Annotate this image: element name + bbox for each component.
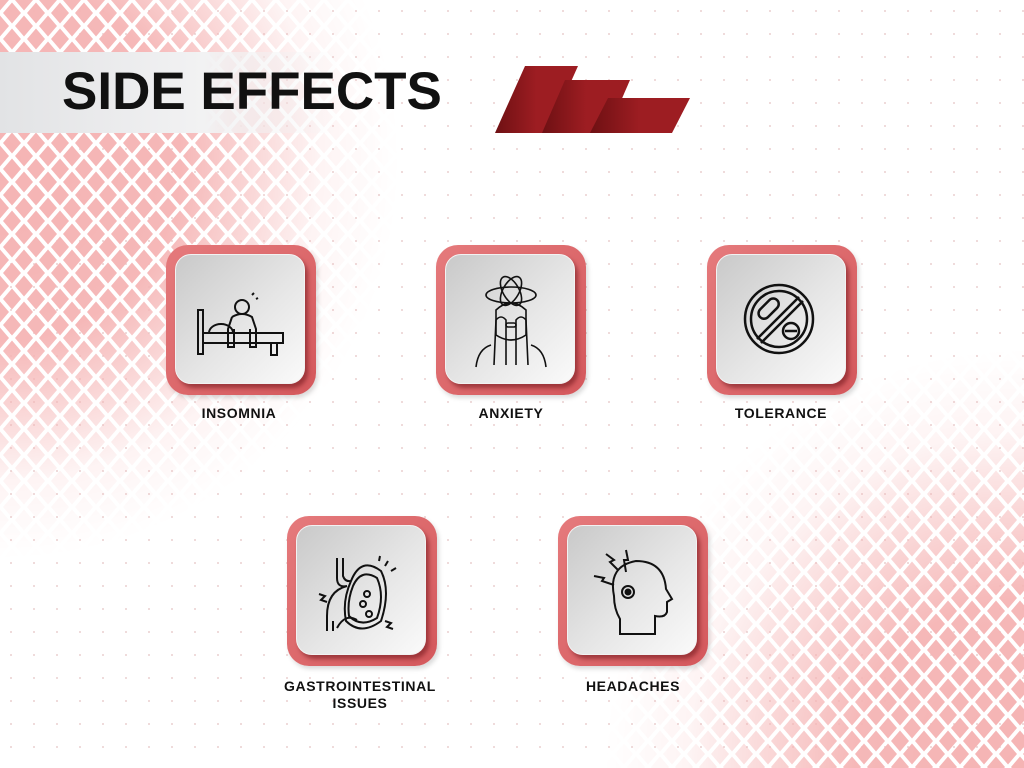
icon: stomach — [318, 556, 396, 631]
card: gastrointestinal — [287, 516, 437, 666]
label: headaches: HEADACHES — [586, 678, 680, 694]
label: gastrointestinal — [284, 678, 436, 711]
label: tolerance: TOLERANCE — [735, 405, 827, 421]
card: headaches — [558, 516, 708, 666]
label: anxiety: ANXIETY — [479, 405, 543, 421]
card: insomnia — [166, 245, 316, 395]
icon: head — [594, 550, 674, 635]
icon: no pills — [744, 284, 814, 354]
title: SIDE EFFECTS — [62, 62, 442, 121]
decorative red steps — [495, 66, 690, 133]
label: gastrointestinal: ISSUES — [333, 695, 387, 711]
label: gastrointestinal: GASTROINTESTINAL — [284, 678, 436, 694]
icon: bed — [197, 292, 284, 356]
icon: anxious person — [475, 276, 547, 368]
title banner — [0, 52, 340, 133]
label: insomnia: INSOMNIA — [202, 405, 276, 421]
card: tolerance — [707, 245, 857, 395]
card: anxiety — [436, 245, 586, 395]
